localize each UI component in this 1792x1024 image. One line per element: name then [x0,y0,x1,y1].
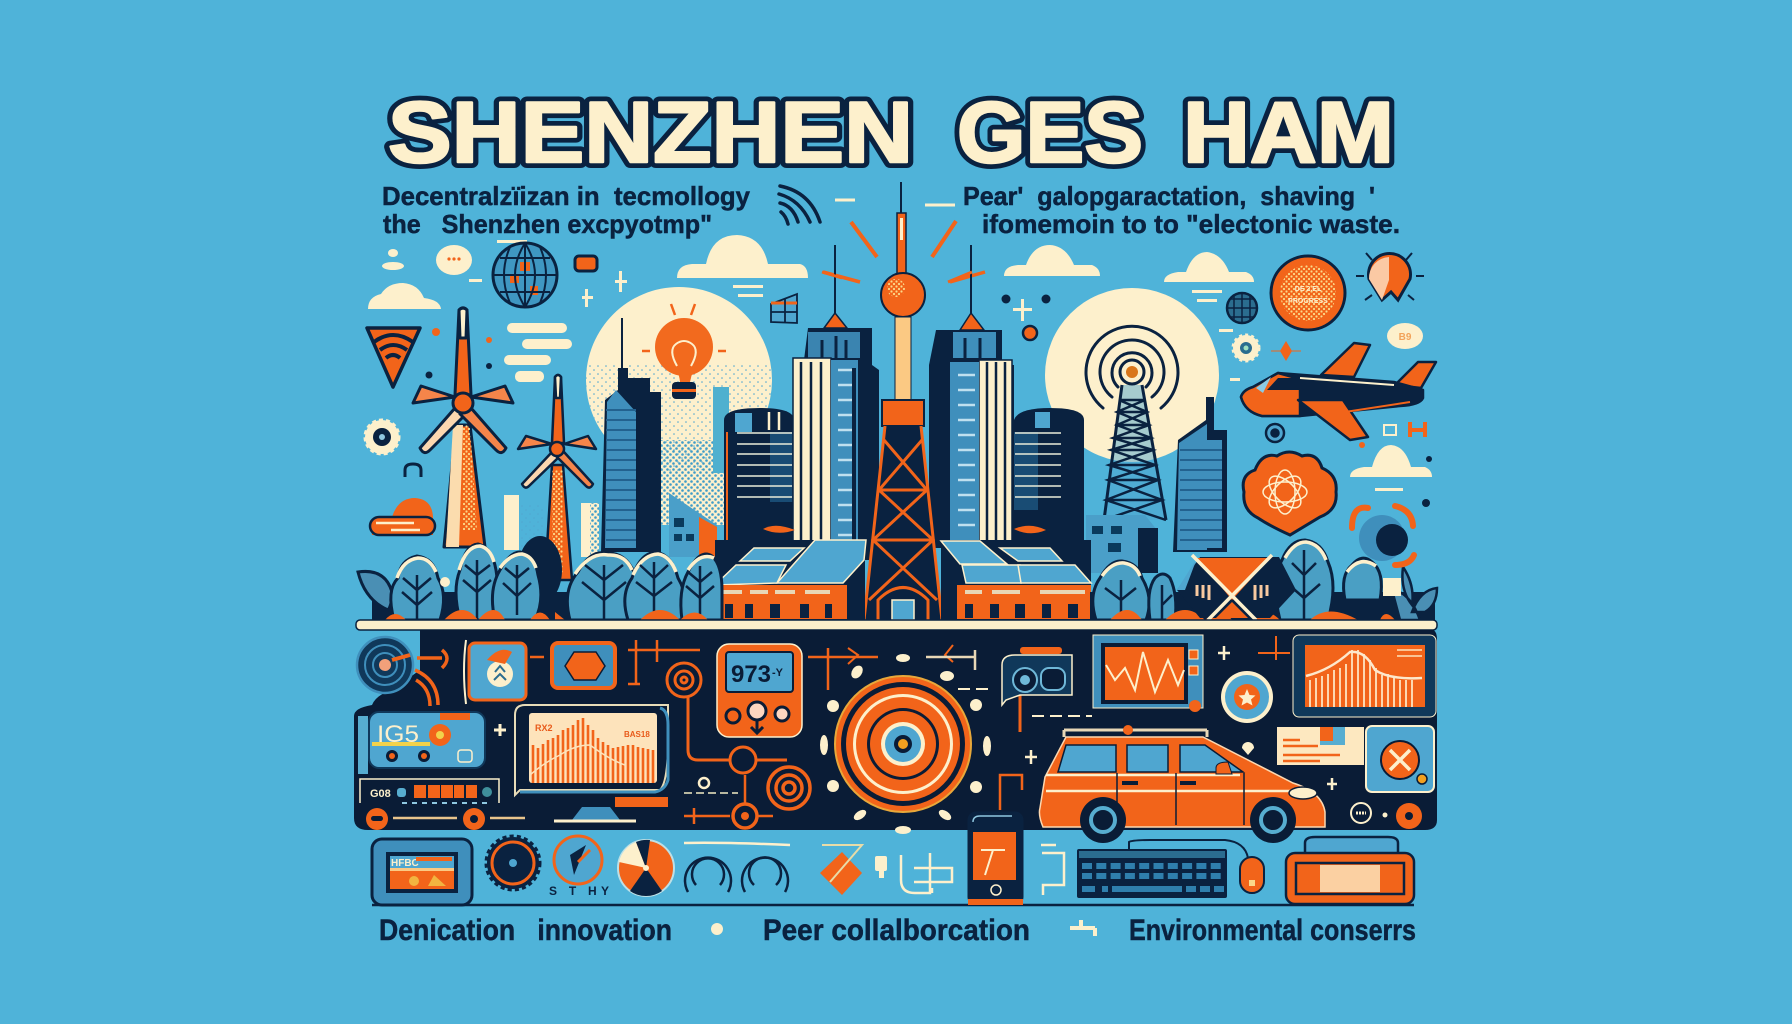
icon: orange signal arcs [415,650,447,706]
building: left blue tower [601,318,661,552]
central radial dial [820,654,991,834]
building: small blue block [1086,515,1158,573]
icon: blue side block [358,716,368,774]
panel: electronics circuit board [354,630,1437,843]
building: left cylinder [724,408,794,557]
building: right cylinder [1014,408,1084,560]
icon: cream circuit glyph [901,853,952,893]
icon: orange cloud [370,498,435,535]
icon: small orange ring [1023,326,1037,340]
title: HAM [1183,85,1394,181]
card: circle icon [464,640,526,704]
icon: digital meter: 973 [731,661,771,688]
icon: small gear right [1233,335,1259,361]
separator glyph [1070,920,1095,936]
subtitle right: Pear' galopgaractation, shaving ' [963,181,1375,211]
card: orange hexagon [552,643,615,688]
building: right blue tower [1173,397,1227,552]
icon: compass with label: S T HY [549,884,609,898]
icon: digital meter: -Y [772,667,784,679]
wind turbine: small [518,375,596,580]
icon: round orange badge: DE 2.EL [1295,286,1322,293]
caption: peer collaboration: Peer collalborcation [763,914,1030,947]
panel background [354,630,1437,830]
icon: cross lines [1258,636,1290,660]
clouds [368,235,1432,477]
title: SHENZHEN [388,85,913,181]
headset icon [1242,742,1254,755]
icon: gear left [365,420,399,454]
title: GES [957,85,1143,181]
icon: HFBC device [372,839,472,905]
waveform monitor [1093,635,1203,712]
tools strip baseline [372,904,1414,906]
infographic canvas [354,96,1438,940]
chart monitor: RX2 [535,723,553,733]
icon: twin gauges [684,843,790,892]
subtitle right [963,181,1400,239]
icon: small globe [1227,293,1257,323]
central tower [864,182,942,620]
icon: orange pointer [1356,253,1424,300]
subtitle left [382,181,751,239]
chart monitor right [1293,635,1436,717]
icon: globe [493,243,557,307]
trees: right group [1090,540,1437,622]
icon: IG5 control device [369,712,485,768]
icon: round orange badge [1271,256,1345,330]
building: left pointed tower [763,245,879,560]
icon: orange spiral pipe [667,663,787,773]
icon: airplane [1241,343,1436,442]
icon: rack unit [360,779,499,803]
icon: radar circle [357,637,413,693]
building: central hall [715,540,1091,620]
connector lines top [530,640,700,684]
icon: star badge [1221,671,1273,723]
subtitle left: the Shenzhen excpyotmp" [383,209,712,239]
small knobs right [1351,803,1422,829]
icon: signal arcs [779,186,820,224]
title: SHENZHEN [388,85,913,181]
sun: right [1045,288,1219,462]
background buildings [504,493,717,557]
separator dot [711,923,723,935]
icon: circuit lines [808,645,1092,810]
icon: orange tent with X [1177,555,1296,620]
sun: left [586,287,772,525]
sky decorations [426,200,1432,507]
icon: compass with label [549,836,609,898]
icon: IG5 control device: IG5 [377,721,419,748]
icon: cream plug [875,856,887,878]
caption: dedication innovation: Denication innovation [379,914,672,947]
icon: small node [684,775,773,828]
subtitle right: ifomemoin to to "electonic waste. [982,209,1400,239]
icon: camera device [1002,647,1072,705]
small cream data card [1277,727,1364,765]
icon: plus sign [494,724,506,736]
icon: window [771,294,797,323]
icon: orange chat tag [575,256,597,271]
icon: HFBC device: HFBC [391,858,419,869]
icon: cream bracket [1041,845,1064,895]
icon: headset [405,464,421,477]
icon: rack unit: G08 [370,788,391,800]
icon: pie dial [618,840,674,896]
radio tower [1086,326,1178,520]
wind turbine: large [413,308,513,547]
icon: rack wheels [366,808,525,830]
icon: plus signs [1025,646,1337,790]
icon: digital meter [717,644,802,737]
title: GES [957,85,1143,181]
orange car [1039,725,1325,843]
chart monitor: BAS18 [624,730,650,739]
building: right pointed tower [929,245,1046,548]
icon: keyboard [1077,849,1227,898]
icon: black dial gear [487,837,539,889]
title [388,85,1394,181]
icon: cream oval tag: B9 [1399,332,1412,343]
icon: shield with wifi [367,328,420,387]
icon: orange case [1286,837,1414,904]
title: HAM [1183,85,1394,181]
square icon card [1366,726,1434,792]
icon: round orange badge: PROGRESS [1288,298,1328,305]
icon: orange network cloud [1243,452,1336,535]
icon: tail H marks [1384,422,1425,437]
icon: dark gear splat [1352,506,1414,565]
icon: smartphone [968,812,1023,905]
icon: cream oval tag [1387,323,1423,349]
chart monitor [515,705,668,821]
cream divider bar [356,620,1437,630]
subtitle left: Decentralzïizan in tecmollogy [382,181,751,211]
icon: mouse with cable [1129,840,1264,893]
trees: left group [358,536,722,622]
icon: speech bubble [436,245,472,275]
icon: lightbulb [642,304,726,399]
caption: environmental concerns: Environmental conserrs [1129,914,1416,947]
icon: target rings [768,767,810,809]
icon: orange diamond [820,845,862,895]
